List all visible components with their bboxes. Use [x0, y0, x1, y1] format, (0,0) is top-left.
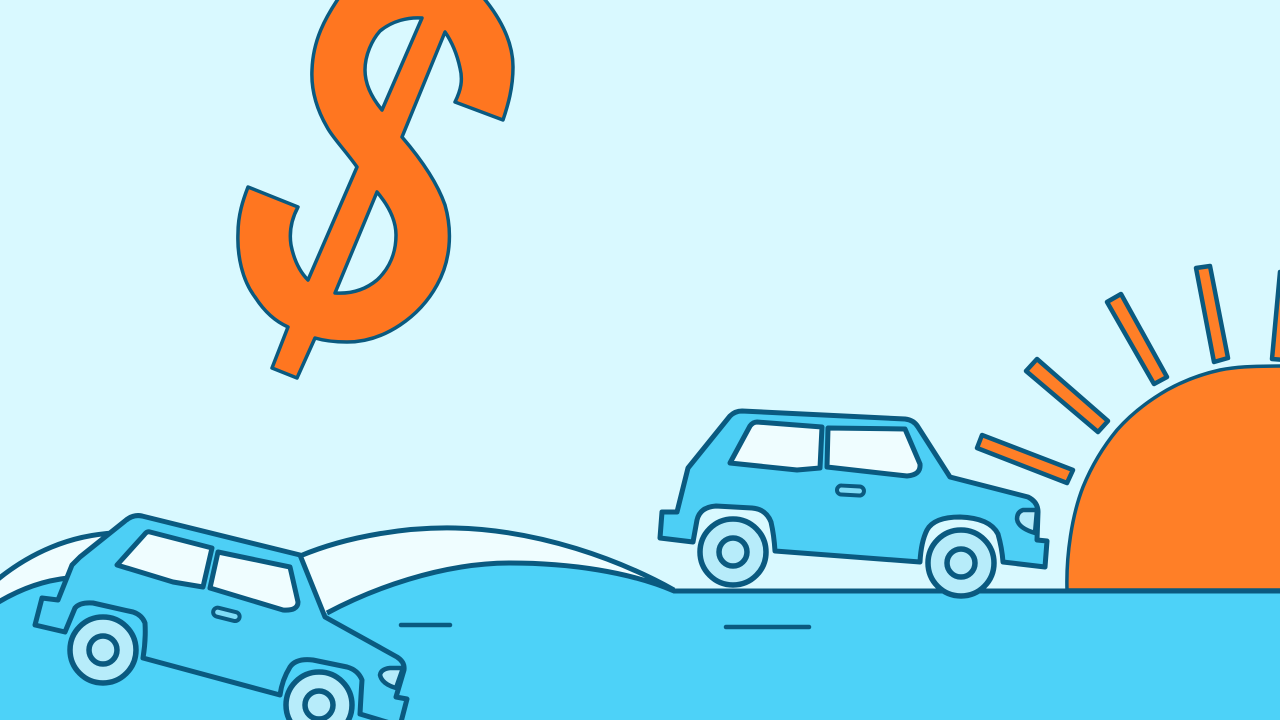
headlight [1017, 510, 1037, 533]
door handle [212, 607, 241, 622]
sun rays [977, 266, 1280, 483]
headlight [380, 668, 403, 688]
wheels [70, 617, 352, 720]
dollar sign [238, 0, 513, 378]
hill: white crest band [0, 528, 674, 640]
sun [977, 266, 1280, 590]
hill and horizon lines [0, 528, 1280, 613]
car: on flat road [660, 411, 1047, 596]
car: tilted on hill [35, 516, 407, 720]
windows [730, 422, 822, 470]
car body [35, 516, 407, 720]
sun disc [1067, 366, 1280, 590]
wheels [700, 519, 994, 596]
car body [660, 411, 1047, 567]
door handle [837, 485, 864, 496]
ground with hills [0, 563, 1280, 720]
road dashes [401, 625, 809, 627]
windows [117, 532, 212, 587]
